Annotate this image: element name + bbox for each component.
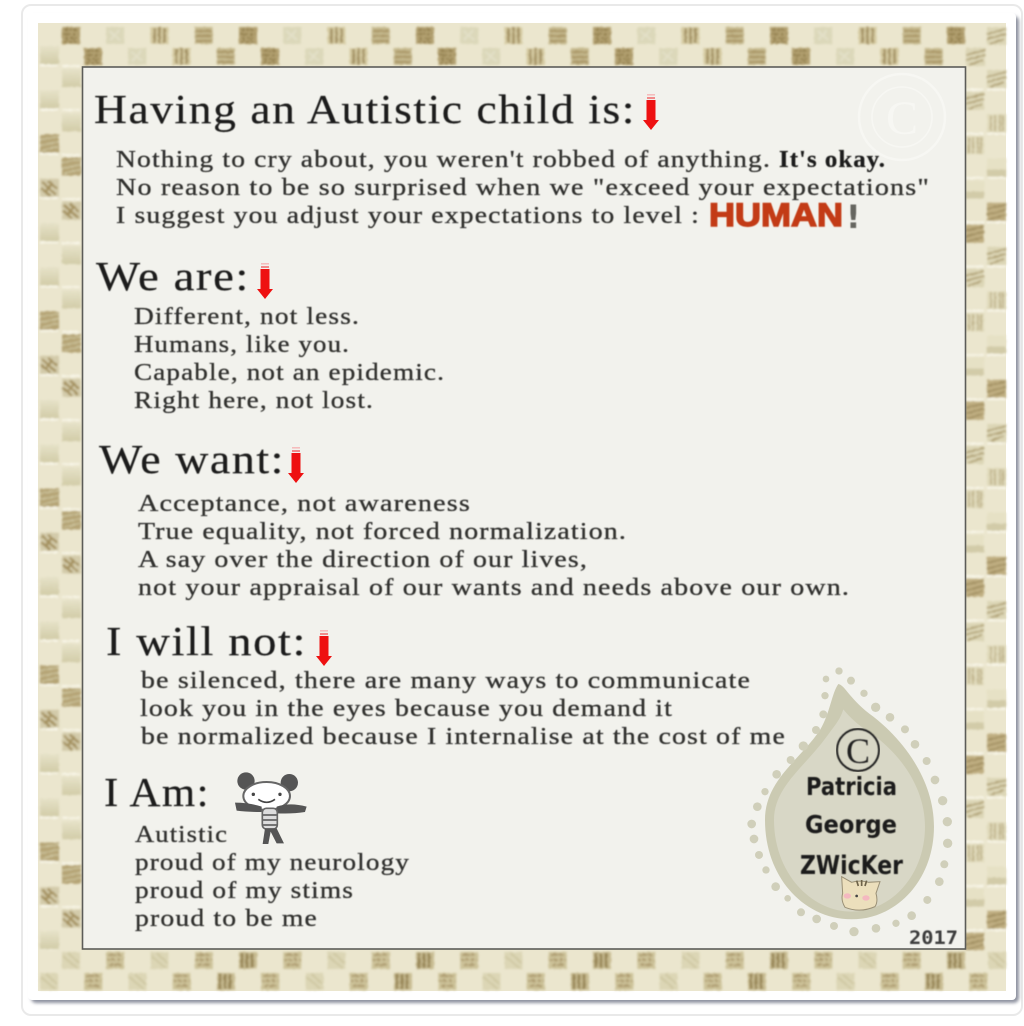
list: be silenced, there are many ways to communicate <box>141 668 751 694</box>
heading: Having an Autistic child is: <box>94 86 636 132</box>
arrow: we want <box>288 447 304 483</box>
human callout: HUMAN <box>709 197 843 233</box>
list: Humans, like you. <box>134 332 350 358</box>
list: Right here, not lost. <box>134 388 374 414</box>
icon: cat <box>842 877 880 910</box>
section: we are <box>96 253 445 414</box>
text content <box>94 86 930 932</box>
it's okay: It's okay. <box>779 147 886 173</box>
intro line 3: I suggest you adjust your expectations to level : <box>116 203 700 229</box>
copyright badge <box>747 667 952 936</box>
heading: We are: <box>96 253 250 299</box>
list: be normalized because I internalise at the cost of me <box>141 724 786 750</box>
dotted outline <box>747 667 952 936</box>
list: Capable, not an epidemic. <box>134 360 445 386</box>
watermark copyright <box>859 74 945 160</box>
teardrop <box>765 684 934 919</box>
intro line 2: No reason to be so surprised when we "exceed your expectations" <box>116 175 930 201</box>
author name: Patricia <box>806 772 897 801</box>
list <box>138 491 850 601</box>
list: A say over the direction of our lives, <box>138 547 588 573</box>
list: proud to be me <box>135 906 318 932</box>
icon: bear figure <box>235 772 307 844</box>
heading: I Am: <box>104 769 210 815</box>
author name: ZWicKer <box>800 851 903 881</box>
author name <box>800 772 903 881</box>
section: i will not <box>106 618 786 750</box>
list: Acceptance, not awareness <box>138 491 471 517</box>
list: not your appraisal of our wants and needs above our own. <box>138 575 850 601</box>
section: i am <box>104 769 410 932</box>
exclamation mark: ! <box>846 198 861 236</box>
central paper panel <box>82 67 966 949</box>
heading: I will not: <box>106 618 307 664</box>
list: proud of my neurology <box>135 850 410 876</box>
list <box>140 668 786 750</box>
list <box>134 304 445 414</box>
section: we want <box>99 436 850 601</box>
watermark copyright: C <box>886 92 918 145</box>
list: Autistic <box>135 822 228 848</box>
copyright symbol: C <box>846 731 870 771</box>
list: True equality, not forced normalization. <box>138 519 627 545</box>
section: having an autistic child <box>94 86 930 236</box>
author name: George <box>805 810 897 839</box>
list <box>135 822 410 932</box>
list: look you in the eyes because you demand it <box>140 696 673 722</box>
arrow: we are <box>257 263 273 299</box>
heading: We want: <box>99 436 285 482</box>
year label: 2017 <box>909 927 958 949</box>
copyright symbol <box>837 729 879 771</box>
list: Different, not less. <box>134 304 360 330</box>
list: proud of my stims <box>135 878 354 904</box>
arrow: i will not <box>316 630 332 666</box>
arrow: having <box>643 94 659 130</box>
intro line 1: Nothing to cry about, you weren't robbed of anything. <box>116 147 771 173</box>
